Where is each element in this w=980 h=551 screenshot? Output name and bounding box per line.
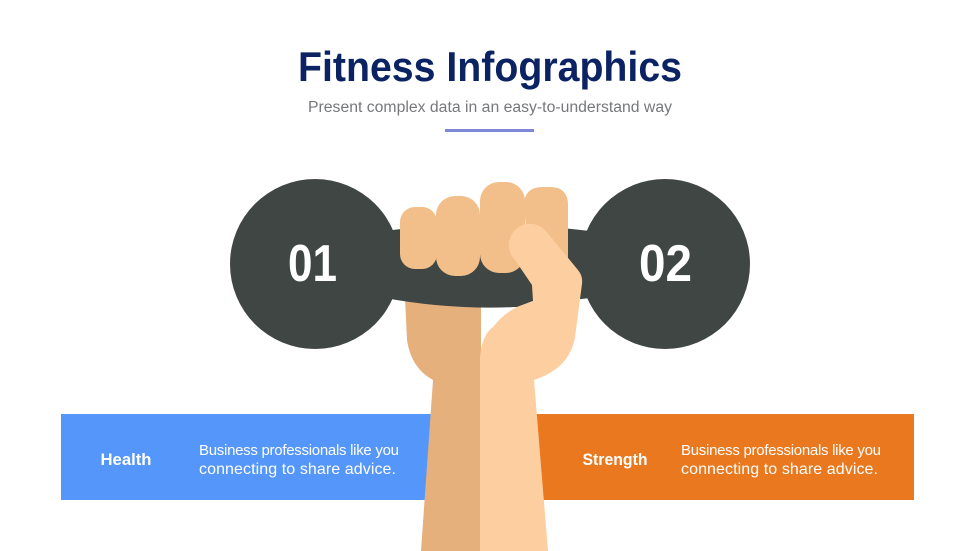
health description: Business professionals like you <box>199 442 399 459</box>
health label: Health <box>100 450 152 469</box>
right weight with number 02: 02 <box>639 235 692 293</box>
health band <box>61 414 436 500</box>
strength label: Strength <box>582 450 648 469</box>
panel: strength <box>530 414 914 500</box>
panel: health <box>61 414 436 500</box>
right weight with number 02 <box>580 179 750 349</box>
finger 1 <box>400 207 437 269</box>
strength description: Business professionals like you <box>681 442 881 459</box>
left weight with number 01: 01 <box>288 235 337 293</box>
left weight with number 01 <box>230 179 400 349</box>
subtitle: Present complex data in an easy-to-understand way <box>308 99 672 116</box>
strength description: connecting to share advice. <box>681 461 878 478</box>
finger 2 <box>436 196 480 276</box>
icon: dumbbell <box>230 179 750 349</box>
finger 3 <box>480 182 525 273</box>
title underline <box>445 129 534 132</box>
icon: fingers <box>400 182 568 276</box>
icon: thumb and forearm, light side <box>480 224 582 551</box>
dumbbell handle <box>385 224 590 308</box>
title: Fitness Infographics <box>298 43 682 90</box>
icon: arm and palm, shadow side <box>405 298 481 551</box>
finger 4 <box>524 187 568 275</box>
health description: connecting to share advice. <box>199 461 396 478</box>
strength band <box>530 414 914 500</box>
